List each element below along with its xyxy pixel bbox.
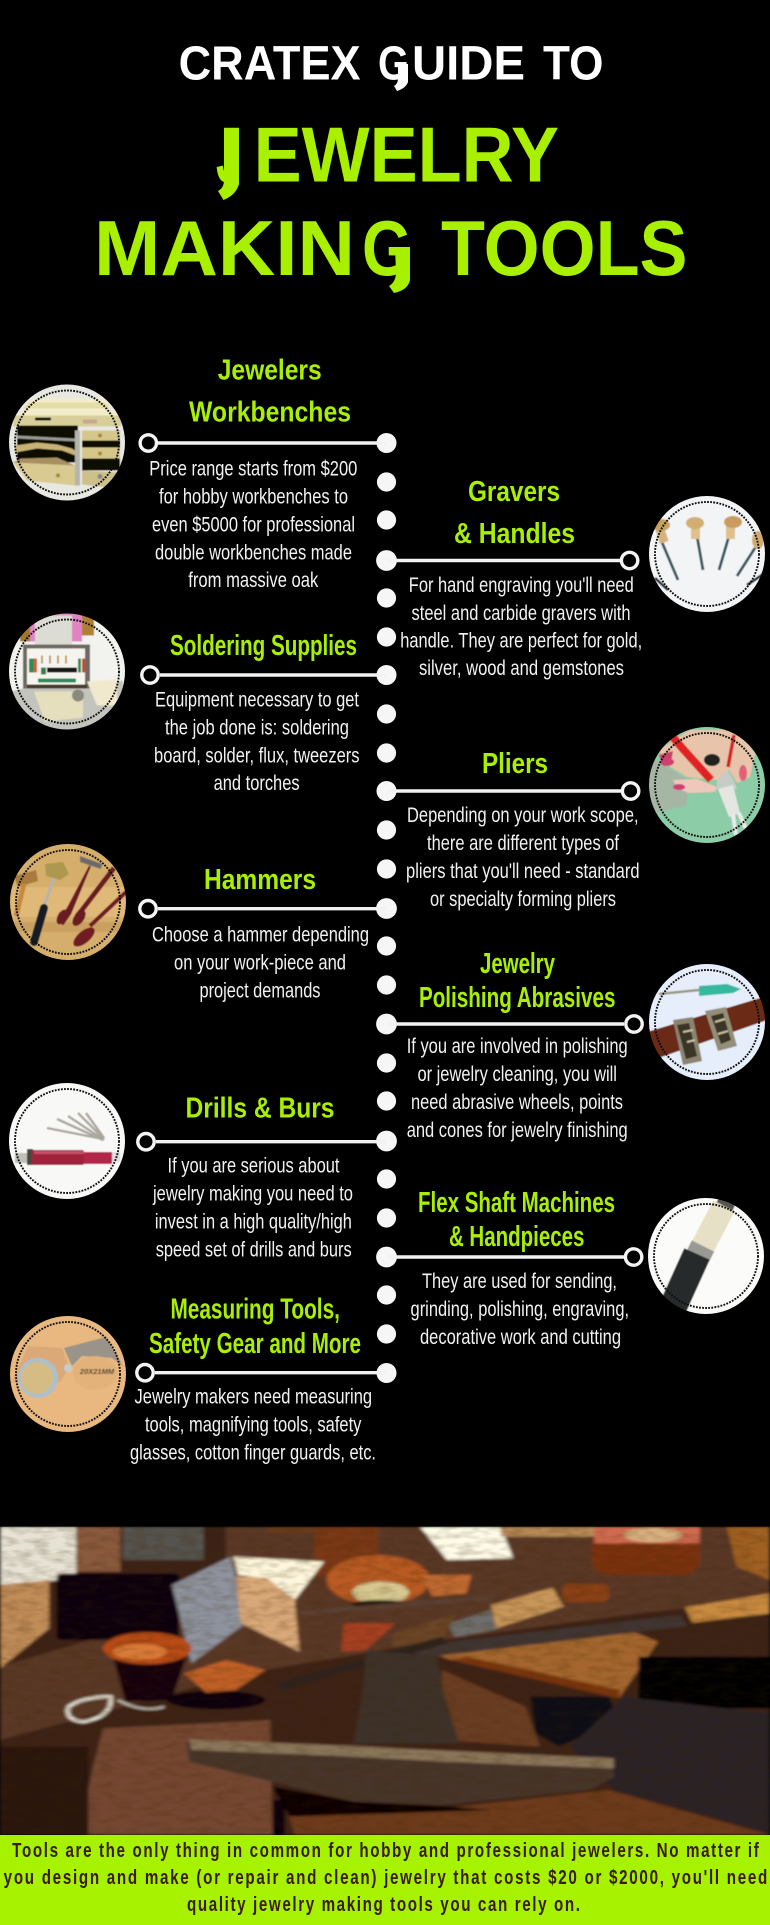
title: G (378, 38, 409, 91)
heading: Polishing Abrasives (419, 982, 615, 1014)
description (411, 1270, 629, 1349)
description: pliers that you'll need - standard (406, 860, 640, 883)
title: UIDE (412, 38, 525, 91)
icon: loupe photo (8, 1314, 128, 1434)
heading: Hammers (204, 864, 316, 896)
heading: Soldering Supplies (170, 630, 357, 662)
icon: soldering supplies photo (7, 612, 127, 732)
description: or jewelry cleaning, you will (417, 1063, 617, 1086)
timeline dots (376, 433, 397, 1383)
description: from massive oak (188, 569, 319, 592)
description: project demands (200, 980, 320, 1003)
heading (149, 1294, 361, 1360)
heading (418, 1187, 615, 1253)
panel: Drills & Burs (7, 1081, 386, 1262)
footer text (4, 1839, 767, 1916)
description: there are different types of (427, 832, 619, 855)
heading: Jewelry (480, 948, 555, 980)
footer text: quality jewelry making tools you can rely on. (187, 1893, 580, 1916)
description: invest in a high quality/high (155, 1211, 352, 1234)
description: jewelry making you need to (152, 1183, 353, 1206)
footer text: Tools are the only thing in common for hobby and professional jewelers. No matter if (12, 1839, 760, 1862)
connector (138, 1134, 386, 1150)
connector (387, 783, 639, 799)
description: need abrasive wheels, points (411, 1091, 623, 1114)
panel: Soldering Supplies (7, 612, 386, 795)
description (407, 1035, 628, 1142)
description: Jewelry makers need measuring (135, 1386, 372, 1409)
heading (419, 948, 615, 1014)
heading: & Handpieces (449, 1221, 584, 1253)
icon: drills photo (7, 1081, 127, 1201)
icon: polishing abrasives photo (647, 962, 767, 1082)
description: double workbenches made (155, 541, 352, 564)
description: the job done is: soldering (165, 717, 349, 740)
connector (137, 1364, 386, 1381)
description (400, 574, 642, 680)
description (149, 458, 357, 592)
icon: gravers photo (647, 494, 767, 614)
title: G (362, 204, 412, 292)
footer text: you design and make (or repair and clean) jewelry that costs $20 or $2000, you'll need (4, 1866, 767, 1889)
description: Price range starts from $200 (149, 458, 357, 481)
icon: workbench photo (7, 382, 127, 502)
heading: Safety Gear and More (149, 1328, 361, 1360)
description: silver, wood and gemstones (419, 657, 624, 680)
heading: Jewelers (218, 354, 322, 386)
heading: Drills & Burs (186, 1092, 334, 1124)
heading: Measuring Tools, (170, 1294, 340, 1326)
description: even $5000 for professional (152, 514, 355, 536)
heading (189, 354, 351, 429)
title: TO (543, 38, 604, 91)
connector (140, 435, 386, 451)
heading: Gravers (468, 476, 560, 508)
description (152, 924, 369, 1003)
icon: loupe photo: 20X21MM (79, 1367, 115, 1376)
description: glasses, cotton finger guards, etc. (130, 1442, 376, 1465)
icon: hammers photo (8, 842, 128, 962)
description (130, 1386, 376, 1465)
panel: Gravers & Handles (387, 476, 767, 680)
panel: Jewelers Workbenches (7, 354, 386, 592)
description: For hand engraving you'll need (409, 574, 634, 597)
description: handle. They are perfect for gold, (400, 630, 642, 653)
connector (140, 900, 386, 917)
heading: Workbenches (189, 397, 351, 429)
description: If you are involved in polishing (407, 1035, 628, 1058)
description: If you are serious about (168, 1155, 340, 1178)
panel: Jewelry Polishing Abrasives (387, 948, 767, 1142)
description: tools, magnifying tools, safety (145, 1414, 362, 1437)
description: and torches (214, 772, 300, 795)
description: on your work-piece and (174, 952, 346, 975)
heading: & Handles (454, 518, 575, 550)
panel: Hammers (8, 842, 386, 1003)
description: Choose a hammer depending (152, 924, 369, 947)
description: They are used for sending, (422, 1270, 617, 1293)
title: TOOLS (441, 204, 688, 292)
heading: Pliers (482, 748, 548, 780)
description (152, 1155, 353, 1262)
title: MAKIN (94, 204, 355, 292)
panel: Pliers (387, 725, 767, 911)
description: speed set of drills and burs (156, 1239, 352, 1262)
connector (142, 667, 386, 683)
footer band (0, 1835, 770, 1925)
heading (454, 476, 575, 550)
description: Equipment necessary to get (155, 689, 359, 712)
heading: Flex Shaft Machines (418, 1187, 615, 1219)
connector (387, 1249, 642, 1265)
title: J (216, 111, 240, 199)
description: for hobby workbenches to (159, 485, 348, 508)
description: or specialty forming pliers (430, 888, 616, 911)
description: board, solder, flux, tweezers (154, 745, 360, 768)
panel: Flex Shaft Machines & Handpieces (387, 1187, 766, 1349)
description: Depending on your work scope, (407, 804, 639, 827)
description: decorative work and cutting (420, 1326, 621, 1349)
photo: workbench with tools (0, 1527, 770, 1835)
connector (387, 1016, 642, 1032)
description: steel and carbide gravers with (412, 602, 630, 625)
description (154, 689, 360, 795)
connector (387, 552, 638, 569)
description (406, 804, 640, 911)
description: and cones for jewelry finishing (407, 1119, 628, 1142)
description: grinding, polishing, engraving, (411, 1298, 629, 1321)
panel: Measuring Tools, Safety Gear and More (8, 1294, 386, 1465)
icon: flex shaft photo (646, 1194, 766, 1318)
icon: pliers photo (647, 725, 767, 845)
title (94, 38, 688, 293)
title: CRATEX (179, 38, 361, 91)
title: EWELRY (254, 111, 559, 199)
